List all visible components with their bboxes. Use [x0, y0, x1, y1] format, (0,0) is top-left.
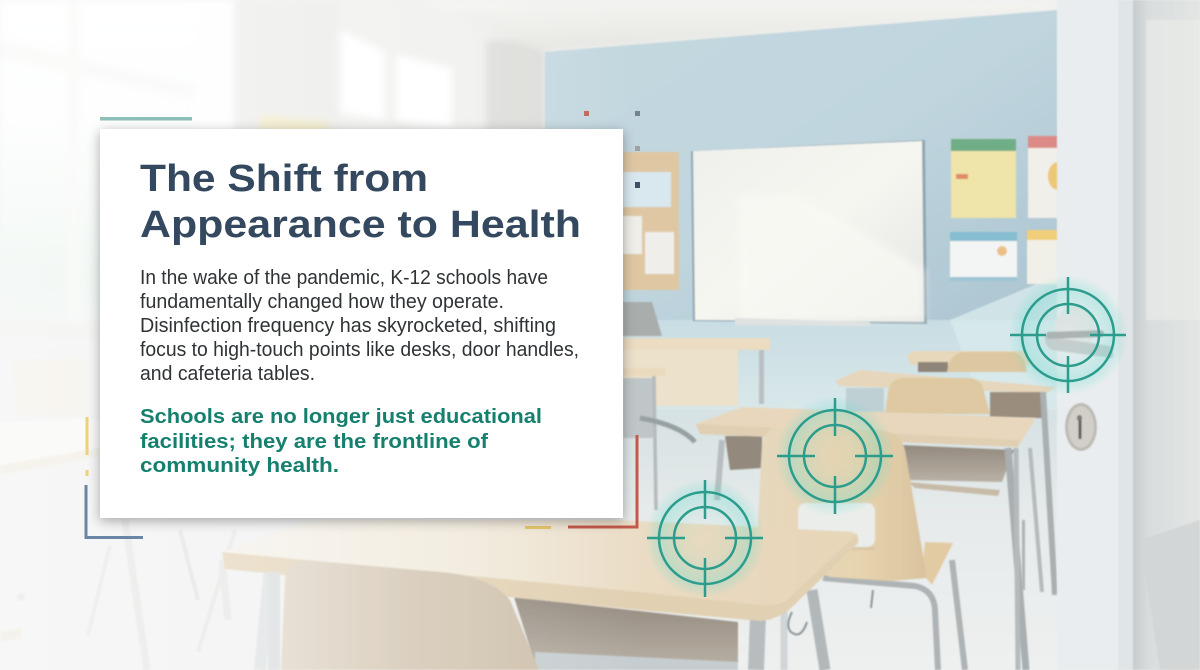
title: Appearance to Health	[140, 204, 581, 246]
far desks and chairs	[835, 351, 1056, 595]
key message: community health.	[140, 455, 339, 477]
decorative accent bar: top teal	[100, 117, 192, 120]
body paragraph: fundamentally changed how they operate.	[140, 291, 504, 313]
icon: target on desk	[645, 478, 765, 598]
wall posters	[950, 136, 1068, 284]
left window wall	[0, 0, 1058, 345]
left back furniture, washed	[0, 358, 270, 670]
blue wall	[545, 10, 1058, 420]
decorative dash: yellow vertical	[86, 417, 88, 455]
key message: facilities; they are the frontline of	[140, 431, 488, 453]
floor	[490, 410, 1060, 670]
icon: target on door handle	[1008, 275, 1128, 395]
decorative squares	[584, 111, 640, 188]
body paragraph: and cafeteria tables.	[140, 363, 315, 385]
door with handle and lock	[1045, 0, 1200, 670]
key message: Schools are no longer just educational	[140, 406, 542, 428]
corkboard	[623, 152, 679, 290]
decorative dash: yellow horizontal	[525, 526, 551, 529]
body paragraph: focus to high-touch points like desks, door handles,	[140, 339, 579, 361]
body paragraph	[140, 267, 579, 385]
left wash overlay	[0, 0, 640, 670]
middle desk and chair	[696, 407, 1036, 670]
title	[140, 158, 581, 246]
body paragraph: In the wake of the pandemic, K-12 schools have	[140, 267, 548, 289]
gray chair and back desk	[623, 302, 770, 510]
icon: target on chair	[775, 396, 895, 516]
panel: text card	[100, 129, 623, 518]
whiteboard	[691, 140, 927, 326]
decorative dot: yellow	[86, 470, 88, 476]
key message	[140, 406, 542, 477]
body paragraph: Disinfection frequency has skyrocketed, shifting	[140, 315, 556, 337]
front desk and chair	[222, 520, 858, 670]
title: The Shift from	[140, 158, 428, 200]
decorative bracket: blue	[86, 485, 143, 538]
decorative bracket: red	[568, 435, 637, 527]
